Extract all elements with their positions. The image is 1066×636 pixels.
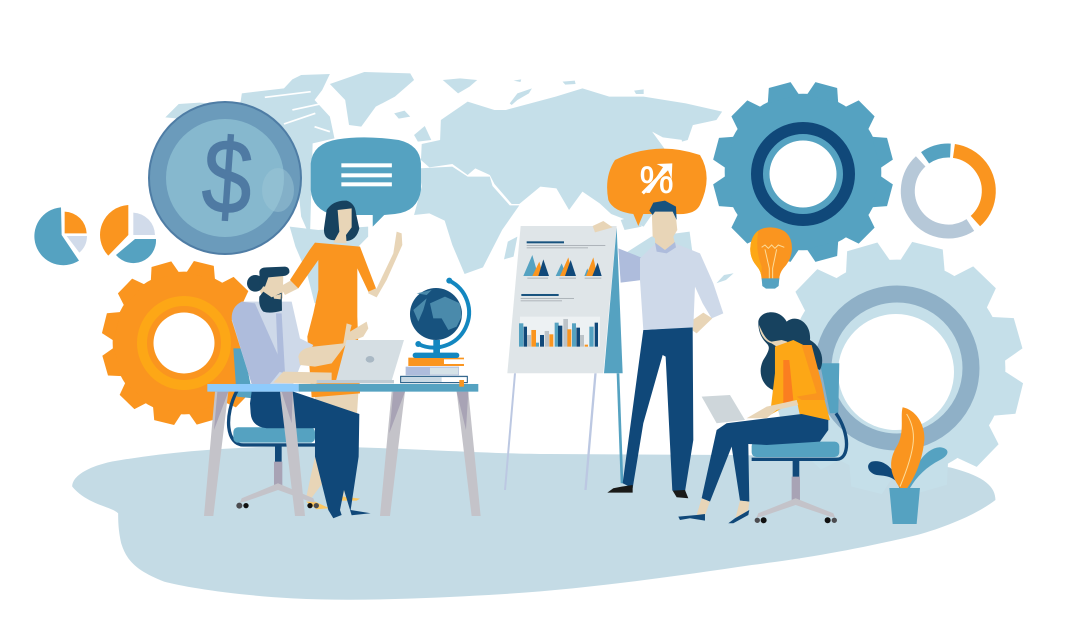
- board: [507, 226, 617, 373]
- shirt placket: [276, 313, 285, 373]
- gear: blue: [693, 62, 913, 282]
- dollar coin: [149, 102, 301, 254]
- trousers: [702, 414, 828, 502]
- undershirt: [783, 360, 793, 405]
- trousers: [250, 392, 371, 518]
- speech bubble: blue: [311, 137, 421, 227]
- text lines icon: [341, 163, 392, 186]
- gear ring: orange: [142, 301, 226, 385]
- legs: [306, 393, 358, 500]
- gear ring: blue: [757, 128, 849, 220]
- dollar sign: $: [199, 115, 256, 237]
- chair base: [755, 460, 837, 523]
- raised arm: [368, 232, 402, 297]
- chair seat: [233, 427, 315, 443]
- back sleeve: [618, 248, 643, 283]
- woman standing: [280, 201, 402, 509]
- hand on hip: [693, 313, 712, 333]
- books: [401, 358, 467, 387]
- hair: [649, 201, 677, 220]
- leg shading: [214, 392, 468, 433]
- head: [247, 267, 289, 313]
- face and neck: [333, 208, 352, 243]
- shirt: [640, 243, 723, 330]
- shirt: [232, 302, 313, 384]
- gear: orange: [85, 244, 283, 442]
- woman seated with laptop: [678, 312, 847, 523]
- arrow head: [657, 163, 672, 179]
- neck and head: [652, 208, 677, 250]
- pie chart: left: [34, 207, 87, 265]
- globe land: [413, 290, 462, 330]
- potted plant: [868, 407, 947, 524]
- pie chart: right: [100, 205, 156, 263]
- filament: [762, 245, 784, 278]
- globe: [410, 288, 462, 340]
- floor shape: [72, 446, 995, 600]
- shoes: [607, 485, 688, 498]
- shoes: [678, 510, 749, 523]
- percent sign: %: [640, 160, 674, 202]
- face: [759, 325, 787, 360]
- ankles: [697, 498, 749, 520]
- man standing: [593, 201, 723, 498]
- heading lines: [521, 241, 605, 301]
- globe stand: [413, 278, 469, 358]
- chair arm: [229, 390, 315, 445]
- jacket panel: [232, 302, 282, 384]
- desk: [204, 384, 481, 516]
- back hand: [280, 280, 298, 295]
- light bulb: [750, 227, 792, 289]
- collar: [655, 242, 676, 253]
- gear ring: large pale: [823, 294, 971, 442]
- board side: [604, 227, 623, 373]
- hair: [324, 201, 359, 241]
- arms: [273, 322, 368, 384]
- dress: [290, 243, 376, 397]
- globe and books: [401, 278, 469, 387]
- gear: large pale: [744, 215, 1050, 521]
- dark leaf: [868, 461, 901, 488]
- chair seat: [752, 442, 839, 457]
- chair base: [236, 445, 319, 509]
- donut chart: [892, 135, 1005, 247]
- mountain charts: [523, 255, 602, 276]
- chair back: [820, 363, 839, 413]
- hand on board: [593, 221, 613, 232]
- man seated with laptop: [229, 267, 371, 518]
- jacket: [770, 340, 830, 423]
- desk legs: [204, 392, 481, 516]
- desktop: [207, 384, 299, 392]
- jacket shading: [797, 345, 825, 400]
- leaf vein: [900, 414, 913, 487]
- speech bubble: orange percent: [607, 149, 707, 226]
- chair arm: [752, 413, 847, 459]
- world map background: [165, 72, 734, 303]
- bulb base: [762, 278, 779, 289]
- pot: [889, 488, 920, 524]
- flipchart: [504, 226, 623, 490]
- trousers: [623, 327, 693, 492]
- laptop on desk: [317, 340, 404, 383]
- bar chart: [519, 317, 600, 347]
- yellow shoes: [306, 495, 360, 509]
- arrow shaft: [643, 166, 670, 193]
- blue leaf: [907, 447, 947, 488]
- stand legs: [504, 373, 597, 490]
- hands and forearm: [747, 400, 798, 418]
- chair back: [233, 348, 253, 398]
- orange leaf: [891, 407, 924, 488]
- hair: [758, 312, 822, 390]
- laptop: [702, 395, 745, 423]
